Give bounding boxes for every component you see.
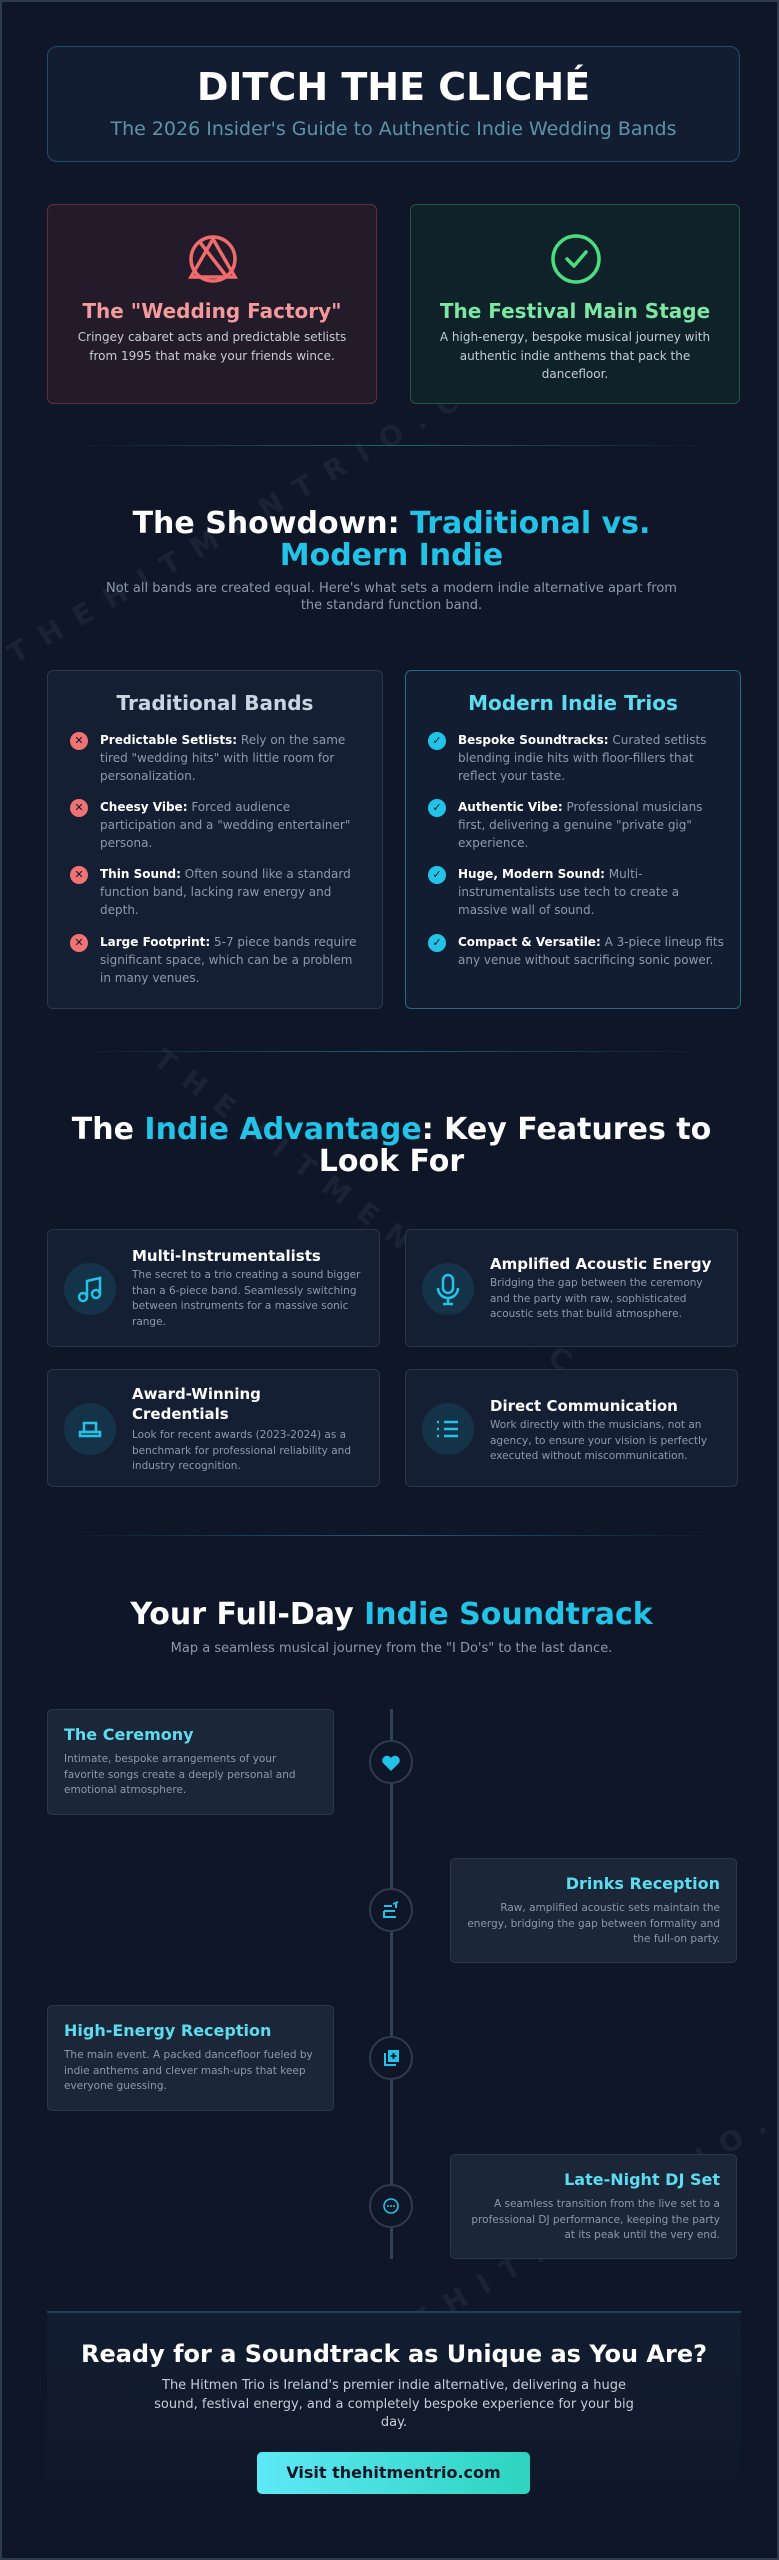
item 2: ✓ xyxy=(432,801,442,814)
button: Visit thehitmentrio.com xyxy=(286,2463,501,2482)
timeline xyxy=(47,1709,737,2259)
feature: award-winning: Look for recent awards (2023-2024) as a benchmark for professional reliability and industry recognition. xyxy=(132,1429,351,1472)
item 1: ✓ xyxy=(432,734,442,747)
icon: music note xyxy=(64,1263,116,1315)
timeline: late-night DJ set: A seamless transition from the live set to a professional DJ performance, keeping the party at its peak until the very end. xyxy=(471,2198,720,2241)
item 2: Cheesy Vibe: Forced audience participation and a "wedding entertainer" persona. xyxy=(100,800,350,850)
CTA panel xyxy=(47,2311,741,2493)
item 2: Authentic Vibe: Professional musicians first, delivering a genuine "private gig" experience. xyxy=(458,800,702,850)
timeline: drinks reception xyxy=(450,1858,737,1963)
timeline: high-energy reception xyxy=(47,2005,334,2111)
heading: full-day soundtrack: Your Full-Day Indie Soundtrack xyxy=(130,1597,653,1632)
heading: showdown xyxy=(132,506,650,573)
timeline: high-energy reception: The main event. A packed dancefloor fueled by indie anthems and clever mash-ups that keep everyone guessing. xyxy=(64,2049,313,2092)
heading: showdown: Modern Indie xyxy=(280,538,503,573)
node: dj xyxy=(369,2184,413,2228)
timeline: ceremony: Intimate, bespoke arrangements of your favorite songs create a deeply personal and emotional atmosphere. xyxy=(64,1753,296,1796)
item 1: Bespoke Soundtracks: Curated setlists blending indie hits with floor-fillers that reflect your taste. xyxy=(458,733,706,783)
header panel xyxy=(47,46,740,162)
item 3: ✓ xyxy=(432,868,442,881)
timeline: drinks reception: Drinks Reception xyxy=(566,1874,720,1893)
heading: Traditional Bands xyxy=(117,691,313,715)
feature: multi-instrumentalists xyxy=(47,1229,380,1347)
feature: direct communication: Direct Communication xyxy=(490,1397,678,1415)
showdown subtitle: Not all bands are created equal. Here's what sets a modern indie alternative apart from the standard function band. xyxy=(106,581,677,613)
panel: modern indie trios xyxy=(405,670,741,1009)
timeline: late-night DJ set: Late-Night DJ Set xyxy=(564,2170,720,2189)
panel: festival main stage xyxy=(410,204,740,404)
icon: check circle xyxy=(551,234,601,284)
feature: direct communication: Work directly with the musicians, not an agency, to ensure your vision is perfectly executed without miscommunication. xyxy=(490,1419,707,1462)
description: A high-energy, bespoke musical journey with authentic indie anthems that pack the dancefloor. xyxy=(440,330,710,381)
timeline: ceremony: The Ceremony xyxy=(64,1725,194,1744)
timeline: ceremony xyxy=(47,1709,334,1815)
feature: multi-instrumentalists: Multi-Instrumentalists xyxy=(132,1247,321,1265)
feature: multi-instrumentalists: The secret to a trio creating a sound bigger than a 6-piece band. Seamlessly switching between instruments for a massive sonic range. xyxy=(132,1269,360,1328)
heading: indie advantage: The Indie Advantage: Key Features to xyxy=(72,1112,711,1147)
icon: list xyxy=(422,1403,474,1455)
item 3: Huge, Modern Sound: Multi-instrumentalists use tech to create a massive wall of sound. xyxy=(458,867,679,917)
timeline: high-energy reception: High-Energy Reception xyxy=(64,2021,271,2040)
item 4: ✓ xyxy=(432,936,442,949)
title: The "Wedding Factory" xyxy=(82,299,342,323)
node: heart xyxy=(369,1740,413,1784)
timeline: late-night DJ set xyxy=(450,2154,737,2259)
feature: direct communication xyxy=(405,1369,738,1487)
feature: amplified acoustic xyxy=(405,1229,738,1347)
panel: traditional bands xyxy=(47,670,383,1009)
item 4: Large Footprint: 5-7 piece bands require significant space, which can be a problem in many venues. xyxy=(100,935,356,985)
feature: award-winning xyxy=(47,1369,380,1487)
feature: amplified acoustic: Amplified Acoustic Energy xyxy=(490,1255,711,1273)
title: DITCH THE CLICHÉ xyxy=(197,65,590,109)
node: party xyxy=(369,2036,413,2080)
panel: wedding factory xyxy=(47,204,377,404)
item 1: ✕ xyxy=(74,734,84,747)
feature: award-winning: Award-Winning xyxy=(132,1385,261,1403)
feature: amplified acoustic: Bridging the gap between the ceremony and the party with raw, sophisticated acoustic sets that build atmosphere. xyxy=(490,1277,703,1320)
icon: warning xyxy=(188,235,238,283)
node: drinks xyxy=(369,1888,413,1932)
feature: award-winning: Credentials xyxy=(132,1405,229,1423)
item 3: Thin Sound: Often sound like a standard function band, lacking raw energy and depth. xyxy=(100,867,351,917)
heading: showdown: The Showdown: Traditional vs. xyxy=(133,506,650,541)
heading: Modern Indie Trios xyxy=(468,691,678,715)
icon: microphone xyxy=(422,1263,474,1315)
item 3: ✕ xyxy=(74,868,84,881)
timeline: drinks reception: Raw, amplified acoustic sets maintain the energy, bridging the gap between formality and the full-on party. xyxy=(467,1902,720,1945)
icon: award xyxy=(64,1403,116,1455)
watermark 1: THEHITMENTRIO.COM xyxy=(2,335,550,671)
title: The Festival Main Stage xyxy=(440,299,710,323)
item 4: Compact & Versatile: A 3-piece lineup fits any venue without sacrificing sonic power. xyxy=(458,935,724,967)
item 4: ✕ xyxy=(74,936,84,949)
subtitle: Map a seamless musical journey from the "I Do's" to the last dance. xyxy=(171,1641,612,1656)
CTA text: The Hitmen Trio is Ireland's premier indie alternative, delivering a huge sound, festival energy, and a completely bespoke experience for your big day. xyxy=(154,2378,634,2430)
item 2: ✕ xyxy=(74,801,84,814)
button xyxy=(257,2452,530,2494)
CTA heading: Ready for a Soundtrack as Unique as You Are? xyxy=(81,2340,707,2368)
subtitle: The 2026 Insider's Guide to Authentic Indie Wedding Bands xyxy=(110,118,677,140)
item 1: Predictable Setlists: Rely on the same tired "wedding hits" with little room for personalization. xyxy=(100,733,345,783)
watermark 2: THEHITMENTRIO.COM xyxy=(147,1042,657,1438)
description: Cringey cabaret acts and predictable setlists from 1995 that make your friends wince. xyxy=(78,330,346,362)
heading: indie advantage: Look For xyxy=(319,1144,464,1179)
heading: indie advantage xyxy=(72,1112,711,1179)
